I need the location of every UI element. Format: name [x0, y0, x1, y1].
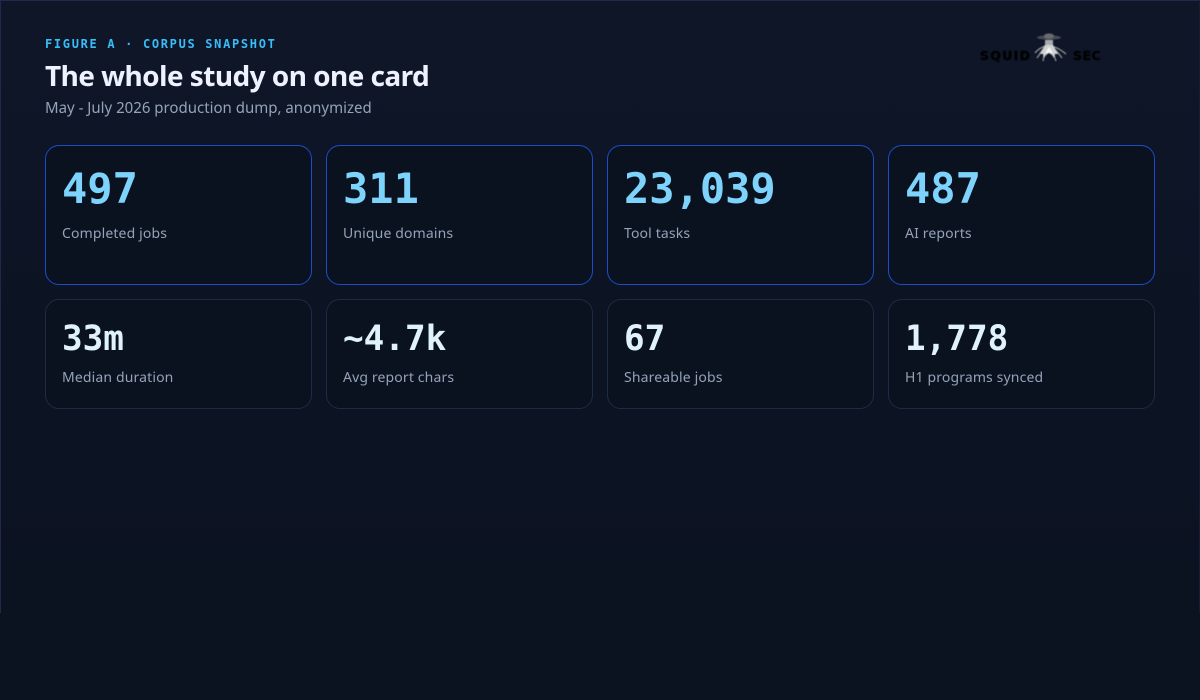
panel: stat card AI reports [888, 145, 1155, 285]
panel: stat card Avg report chars [326, 299, 593, 409]
label: Unique domains [343, 224, 453, 243]
value: 23,039 [624, 164, 776, 213]
label: Tool tasks [624, 224, 690, 243]
title: The whole study on one card [45, 57, 429, 95]
label: AI reports [905, 224, 972, 243]
value: 497 [62, 164, 138, 213]
value: 1,778 [905, 319, 1008, 359]
panel: stat card Shareable jobs [607, 299, 874, 409]
value: 33m [62, 319, 124, 359]
label: H1 programs synced [905, 368, 1043, 387]
subtitle: May - July 2026 production dump, anonymized [45, 98, 372, 118]
label: Avg report chars [343, 368, 454, 387]
eyebrow label: FIGURE A · CORPUS SNAPSHOT [45, 37, 277, 51]
value: ~4.7k [343, 319, 446, 359]
value: 487 [905, 164, 981, 213]
value: 67 [624, 319, 665, 359]
label: Shareable jobs [624, 368, 723, 387]
panel: stat card Completed jobs [45, 145, 312, 285]
icon: Squid Sec logo: SEC [1073, 48, 1101, 63]
label: Completed jobs [62, 224, 167, 243]
panel: stat card Unique domains [326, 145, 593, 285]
panel: stat card H1 programs synced [888, 299, 1155, 409]
icon: Squid Sec logo [980, 32, 1101, 63]
panel: stat card Median duration [45, 299, 312, 409]
value: 311 [343, 164, 419, 213]
icon: Squid Sec logo: SQUID [980, 48, 1031, 63]
label: Median duration [62, 368, 173, 387]
panel: stat card Tool tasks [607, 145, 874, 285]
